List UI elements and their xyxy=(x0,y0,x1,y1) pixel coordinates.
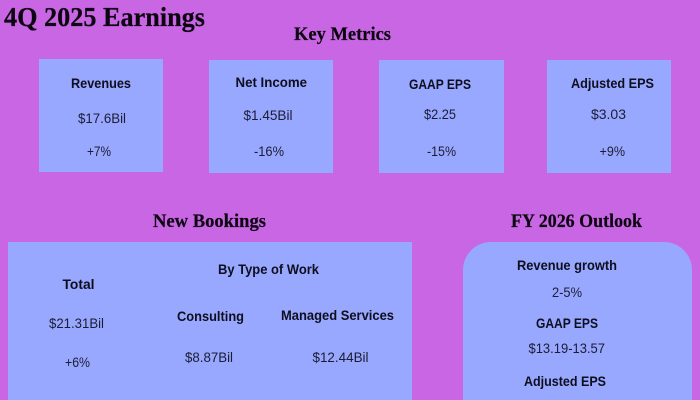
panel: new bookings: Total xyxy=(62,276,94,292)
heading: key metrics: Key Metrics xyxy=(294,24,391,45)
panel: net income: Net Income xyxy=(236,74,307,90)
heading: FY 2026 outlook: FY 2026 Outlook xyxy=(511,211,642,232)
panel: GAAP EPS: GAAP EPS xyxy=(409,76,471,92)
panel: adjusted EPS: $3.03 xyxy=(591,106,626,122)
panel: new bookings: $21.31Bil xyxy=(49,315,104,331)
panel: new bookings: $8.87Bil xyxy=(185,349,233,365)
panel: adjusted EPS: Adjusted EPS xyxy=(571,75,654,91)
panel: outlook: GAAP EPS xyxy=(536,315,598,331)
panel: new bookings: Managed Services xyxy=(281,307,394,323)
panel: outlook: Revenue growth xyxy=(517,257,617,273)
panel: GAAP EPS xyxy=(379,60,504,173)
panel: outlook: $13.19-13.57 xyxy=(528,340,605,356)
panel: new bookings: +6% xyxy=(65,354,90,370)
panel: outlook xyxy=(463,242,692,400)
panel: revenues: +7% xyxy=(87,143,111,159)
panel: new bookings: $12.44Bil xyxy=(312,349,368,365)
panel: GAAP EPS: -15% xyxy=(427,143,456,159)
panel: revenues: Revenues xyxy=(71,75,131,91)
heading: new bookings: New Bookings xyxy=(153,211,266,232)
panel: new bookings: Consulting xyxy=(177,308,244,324)
panel: new bookings: By Type of Work xyxy=(218,261,319,277)
panel: net income xyxy=(209,60,333,173)
panel: adjusted EPS xyxy=(547,60,671,173)
panel: revenues: $17.6Bil xyxy=(78,110,126,126)
panel: revenues xyxy=(39,59,163,172)
panel: net income: $1.45Bil xyxy=(244,107,292,123)
panel: outlook: 2-5% xyxy=(552,284,582,300)
title: 4Q 2025 Earnings xyxy=(4,2,205,32)
panel: GAAP EPS: $2.25 xyxy=(424,106,456,122)
panel: adjusted EPS: +9% xyxy=(600,143,625,159)
panel: net income: -16% xyxy=(254,143,284,159)
panel: new bookings xyxy=(8,242,412,400)
panel: outlook: Adjusted EPS xyxy=(524,373,606,389)
